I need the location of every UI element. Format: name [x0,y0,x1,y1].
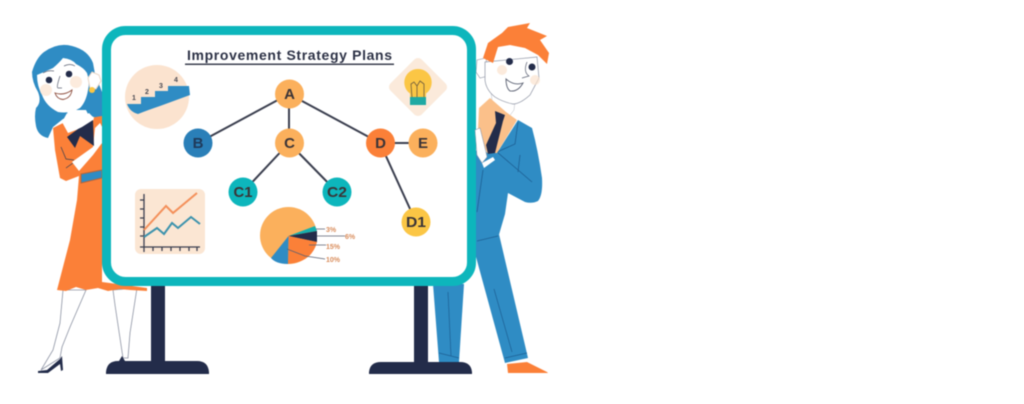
collar [62,113,94,133]
icon: stairs: 3 [159,83,163,90]
nose and brows [43,64,75,88]
node D1: D1 [406,214,426,231]
hair [483,23,549,64]
node C [275,128,304,158]
title: Improvement Strategy Plans [187,47,392,63]
trouser creases [439,289,527,358]
shirt collar [478,98,517,153]
face [37,58,89,112]
trousers [433,230,528,363]
mouth [506,79,523,91]
bow tie [67,120,94,148]
line chart [135,189,205,254]
node D: D [375,135,386,152]
cuff [482,157,495,168]
board stand: left leg [106,284,209,374]
icon: stairs: 2 [145,89,149,96]
face [485,57,539,104]
node A: A [284,86,295,103]
neck [67,110,88,124]
tree nodes [184,80,438,236]
shoe [507,362,548,373]
node D [366,128,395,158]
woman presenter [32,45,147,373]
ear [88,72,101,89]
man's hand over board edge [475,128,487,163]
pie labels [326,227,356,264]
node C1 [228,178,258,206]
dress [53,116,147,291]
ear [476,58,488,78]
woman's hand edge [100,123,102,145]
node E: E [418,135,428,152]
eyes [506,58,536,70]
hand and cuff [72,123,102,171]
node C2 [322,178,352,206]
neck [491,92,516,122]
hair [32,45,102,138]
pie leader lines [287,229,345,259]
jacket [470,120,542,242]
shoes [38,356,125,373]
jacket lines [477,122,532,241]
node B: B [193,135,204,152]
icon: light bulb [387,56,449,118]
icon: stairs: 4 [174,77,178,84]
tie [486,111,505,154]
title underline [185,64,394,65]
cheeks [497,65,540,85]
belt [81,170,102,183]
hands [475,128,487,163]
mouth [55,90,72,100]
node D1 [402,208,430,236]
pie labels: 3% [326,227,337,234]
pie chart [260,207,356,264]
pie labels: 10% [326,257,341,264]
board stand: right leg [369,284,472,374]
icon: stairs [125,65,190,129]
earring [89,87,95,93]
icon: stairs: 1 [132,95,136,102]
pie labels: 15% [326,244,341,251]
tree connectors [198,94,423,222]
node B [184,128,212,158]
arm line [61,147,74,168]
presentation board [106,30,472,282]
man presenter [433,23,549,373]
legs [41,288,137,370]
node A [275,80,304,108]
node C: C [284,135,295,152]
pie labels: 6% [345,234,356,241]
node C1: C1 [234,184,252,201]
node E [408,128,438,158]
eyes [46,71,72,83]
node C2: C2 [327,184,347,201]
nose [522,62,529,78]
cheeks [40,76,82,96]
